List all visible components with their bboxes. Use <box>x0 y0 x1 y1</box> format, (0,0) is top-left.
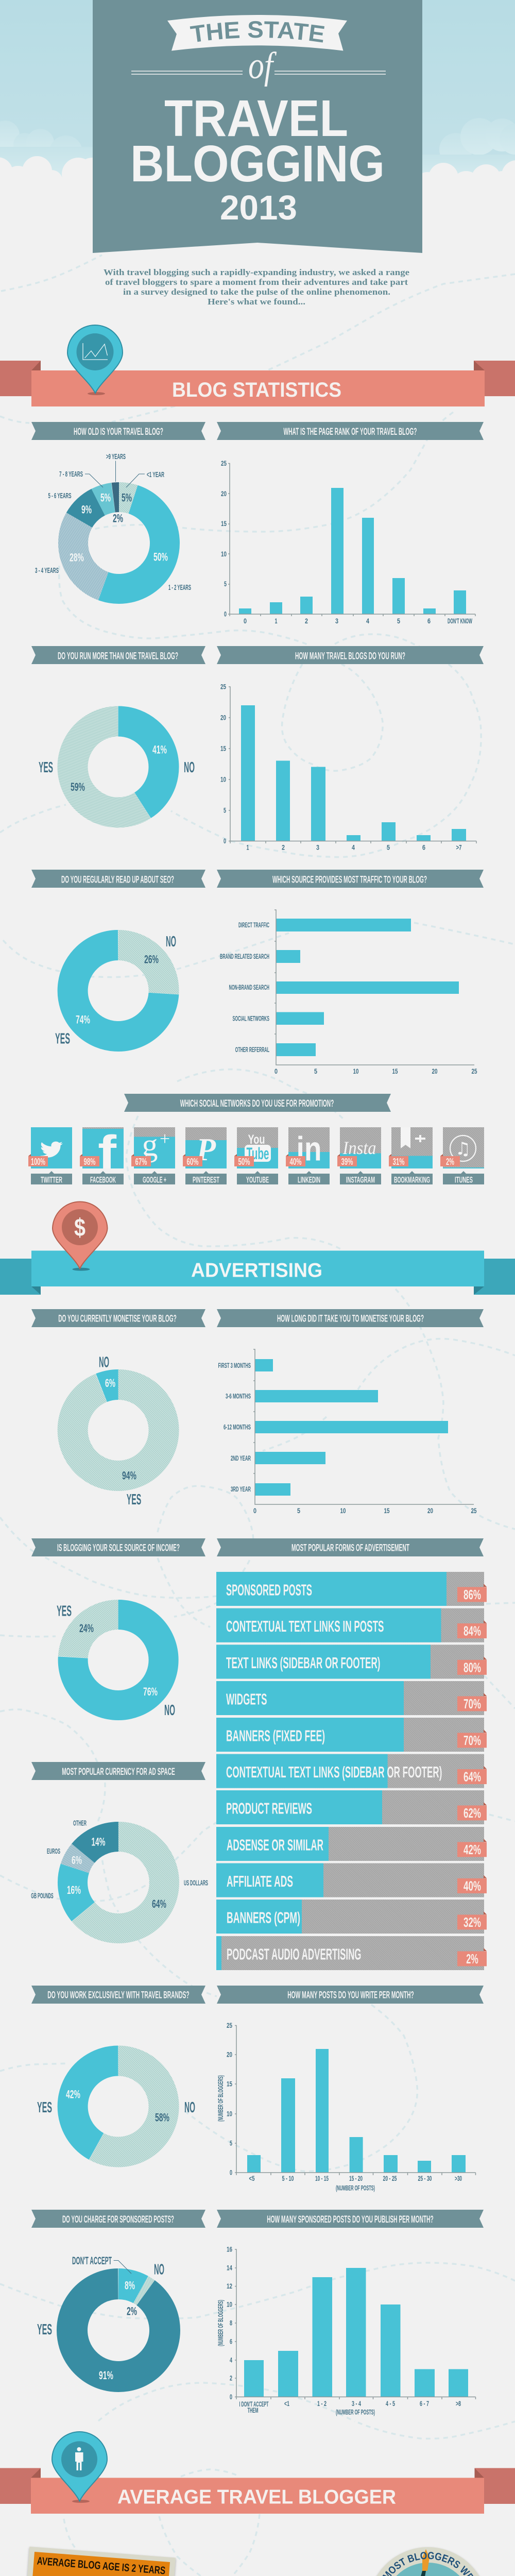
bar chart: sponsored posts per month <box>217 2245 476 2416</box>
bar chart: sponsored posts per month: THEM <box>247 2406 259 2414</box>
tile: bookmarking <box>389 1127 433 1185</box>
horizontal bar chart: time to monetise: 3RD YEAR <box>231 1485 251 1493</box>
panel: social network tiles <box>28 1126 484 1185</box>
donut chart: blog age: 5% <box>122 492 132 504</box>
bar chart: number of blogs: 2 <box>282 844 285 851</box>
row: product reviews 62 percent <box>216 1790 487 1824</box>
label: social networks: WHICH SOCIAL NETWORKS DO YOU USE FOR PROMOTION? <box>180 1098 334 1109</box>
bar chart: page rank: 0 <box>244 617 247 625</box>
tile: instagram: INSTAGRAM <box>346 1175 375 1185</box>
intro text: in a survey designed to take the pulse of the online phenomenon. <box>123 287 390 297</box>
row: adsense 42 percent: 42% <box>464 1842 481 1857</box>
title: travel: TRAVEL <box>164 90 348 147</box>
donut chart: blog age: 3 - 4 YEARS <box>35 566 59 575</box>
bar chart: number of blogs: 10 <box>220 776 226 783</box>
title ribbon: the state: THE STATE <box>190 21 324 42</box>
bar chart: posts per month: >30 <box>455 2175 462 2182</box>
bar chart: number of blogs: 15 <box>220 745 226 752</box>
section ribbon: advertising <box>0 1251 515 1295</box>
row: podcast audio 2 percent <box>216 1936 487 1970</box>
tile: youtube: Tube <box>246 1144 269 1163</box>
bar chart: sponsored posts per month: <1 <box>284 2400 289 2408</box>
section ribbon: average travel blogger <box>0 2468 515 2514</box>
bar chart: number of blogs: 4 <box>352 844 355 851</box>
horizontal bar chart: traffic source: DIRECT TRAFFIC <box>238 921 269 929</box>
bar chart: posts per month: 25 - 30 <box>418 2175 432 2182</box>
bar chart: sponsored posts per month: I DON'T ACCEPT <box>239 2400 269 2408</box>
label: advertisement forms: MOST POPULAR FORMS OF ADVERTISEMENT <box>291 1543 409 1554</box>
label: social networks <box>124 1094 391 1112</box>
title: blogging: BLOGGING <box>130 135 385 193</box>
text: NO <box>164 1702 175 1719</box>
tile: twitter: TWITTER <box>41 1175 62 1185</box>
tile: google plus: 67% <box>135 1157 147 1167</box>
text: NO <box>166 934 176 950</box>
bar chart: page rank <box>221 460 475 625</box>
label: travel brands <box>31 1986 205 2004</box>
donut chart: monetise: YES <box>127 1492 141 1508</box>
label: seo <box>31 870 205 888</box>
bar chart: page rank: 3 <box>335 617 338 625</box>
tile: youtube <box>234 1127 278 1185</box>
title: of with double rules <box>131 45 386 87</box>
horizontal bar chart: traffic source: 0 <box>274 1067 278 1075</box>
donut chart: more than one blog: YES <box>39 759 53 776</box>
bar chart: page rank: 6 <box>427 617 431 625</box>
bar chart: page rank: 1 <box>275 617 278 625</box>
horizontal bar chart: traffic source: 5 <box>314 1067 317 1075</box>
bar chart: page rank: 4 <box>366 617 369 625</box>
donut chart: currency: 6% <box>72 1854 82 1867</box>
donut chart: sole income <box>57 1603 175 1719</box>
tile: google plus: + <box>160 1128 170 1149</box>
donut chart: seo: 26% <box>144 953 159 965</box>
title: 2013: 2013 <box>220 189 297 227</box>
row: contextual text links sidebar 64 percent <box>216 1754 487 1788</box>
bar chart: posts per month: 15 - 20 <box>349 2175 363 2182</box>
row: text links 80 percent <box>216 1645 487 1679</box>
bar chart: posts per month: 10 - 15 <box>315 2175 329 2182</box>
tile: facebook <box>80 1126 124 1185</box>
tile: youtube: YOUTUBE <box>246 1175 269 1185</box>
row: banners fixed fee 70 percent <box>216 1718 487 1752</box>
tile: twitter: 100% <box>31 1157 45 1167</box>
icon: dollar map pin: $ <box>74 1214 85 1242</box>
bar chart: number of blogs: 25 <box>220 683 226 690</box>
donut chart: more than one blog <box>39 704 195 830</box>
tile: facebook: 98% <box>83 1157 96 1167</box>
donut chart: sole income: 24% <box>79 1622 94 1635</box>
title ribbon: the state <box>167 15 347 50</box>
bar chart: number of blogs: 3 <box>316 844 319 851</box>
horizontal bar chart: time to monetise: 10 <box>340 1507 346 1515</box>
bar chart: sponsored posts per month: 16 <box>227 2245 232 2253</box>
tile: youtube: You <box>248 1132 265 1147</box>
tile: google plus <box>131 1127 175 1185</box>
icon: dollar map pin <box>53 1202 107 1271</box>
bar chart: sponsored posts per month: >8 <box>456 2400 461 2408</box>
bar chart: sponsored posts per month: 14 <box>227 2264 232 2272</box>
bar chart: number of blogs: 5 <box>224 807 226 814</box>
label: sole income: IS BLOGGING YOUR SOLE SOURCE OF INCOME? <box>57 1543 180 1554</box>
row: widgets 70 percent: 70% <box>464 1696 481 1711</box>
bar chart: number of blogs: 0 <box>224 837 226 845</box>
row: contextual text links in posts 84 percent <box>216 1608 487 1642</box>
label: how old is your travel blog <box>31 422 205 440</box>
donut chart: travel brands: YES <box>37 2099 52 2116</box>
tile: itunes <box>440 1127 484 1185</box>
donut chart: charge for sponsored posts: DON'T ACCEPT <box>72 2255 112 2267</box>
tile: itunes: ITUNES <box>455 1175 473 1185</box>
label: sponsored posts per month <box>217 2210 484 2228</box>
donut chart: charge for sponsored posts: 91% <box>99 2369 113 2382</box>
label: how many blogs: HOW MANY TRAVEL BLOGS DO YOU RUN? <box>295 651 405 662</box>
row: adsense 42 percent <box>216 1827 487 1861</box>
label: traffic source <box>217 870 484 888</box>
bar chart: posts per month: 15 <box>227 2080 232 2088</box>
horizontal bar chart: time to monetise: 5 <box>297 1507 300 1515</box>
section ribbon: blog statistics <box>0 361 515 406</box>
label: currency <box>31 1762 205 1780</box>
tile: facebook: FACEBOOK <box>90 1175 116 1185</box>
bar chart: posts per month <box>217 2022 476 2192</box>
donut chart: currency: 64% <box>152 1897 166 1910</box>
bar chart: number of blogs: 1 <box>246 844 249 851</box>
donut chart: blog age: <1 YEAR <box>147 470 164 479</box>
bar chart: posts per month: 0 <box>230 2169 232 2176</box>
row: banners fixed fee 70 percent: BANNERS (FIXED FEE) <box>226 1727 325 1744</box>
donut chart: more than one blog: 59% <box>71 781 85 793</box>
label: seo: DO YOU REGULARLY READ UP ABOUT SEO? <box>61 875 174 885</box>
row: affiliate ads 40 percent: AFFILIATE ADS <box>227 1873 293 1890</box>
donut chart: more than one blog: 41% <box>152 743 167 756</box>
donut chart: blog age: 28% <box>70 551 84 564</box>
panel: advertisement form bars <box>216 1572 487 1970</box>
horizontal bar chart: time to monetise: 3-6 MONTHS <box>226 1392 251 1400</box>
donut chart: blog age: >9 YEARS <box>106 452 126 461</box>
bar chart: sponsored posts per month: 3 - 4 <box>352 2400 361 2408</box>
row: affiliate ads 40 percent: 40% <box>464 1878 481 1894</box>
bar chart: sponsored posts per month: 12 <box>227 2282 232 2290</box>
row: product reviews 62 percent: 62% <box>464 1805 481 1821</box>
row: sponsored posts 86 percent: 86% <box>464 1587 481 1602</box>
donut chart: monetise: 94% <box>122 1469 136 1482</box>
donut chart: seo: YES <box>55 1030 70 1047</box>
donut chart: blog age <box>35 452 191 606</box>
text: NO <box>184 759 195 776</box>
bar chart: page rank: 20 <box>221 490 227 498</box>
donut chart: travel brands: 58% <box>155 2111 169 2124</box>
label: charge for sponsored posts: DO YOU CHARGE FOR SPONSORED POSTS? <box>62 2214 174 2225</box>
intro text: With travel blogging such a rapidly-expanding industry, we asked a range <box>104 267 409 277</box>
row: banners cpm 32 percent: 32% <box>464 1914 481 1930</box>
label: advertisement forms <box>217 1538 484 1556</box>
label: run more than one blog: DO YOU RUN MORE THAN ONE TRAVEL BLOG? <box>58 651 178 662</box>
row: banners cpm 32 percent: BANNERS (CPM) <box>227 1909 300 1927</box>
bar chart: sponsored posts per month: 4 <box>230 2357 232 2364</box>
row: product reviews 62 percent: PRODUCT REVIEWS <box>226 1800 312 1818</box>
statue <box>421 2571 426 2576</box>
intro text: of travel bloggers to spare a moment from their adventures and take part <box>105 277 408 287</box>
row: contextual text links in posts 84 percent: 84% <box>464 1623 481 1639</box>
bar chart: page rank: DON'T KNOW <box>448 617 472 625</box>
donut chart: travel brands: 42% <box>66 2088 80 2101</box>
label: how many blogs <box>217 646 484 664</box>
donut chart: blog age: 9% <box>81 503 92 516</box>
text: NO <box>184 2099 195 2116</box>
sky with clouds <box>0 0 515 201</box>
tile: linkedin: 40% <box>289 1157 302 1167</box>
donut chart: blog age: 50% <box>153 550 168 564</box>
donut chart: monetise <box>59 1354 177 1508</box>
tile: google plus: GOOGLE + <box>143 1175 166 1185</box>
tile: pinterest: PINTEREST <box>193 1175 219 1185</box>
donut chart: currency: EUROS <box>47 1847 60 1856</box>
tile: linkedin <box>286 1127 330 1185</box>
row: contextual text links in posts 84 percent: CONTEXTUAL TEXT LINKS IN POSTS <box>226 1618 384 1635</box>
bar chart: page rank: 5 <box>224 580 227 588</box>
text: US DOLLARS <box>184 1879 208 1888</box>
bar chart: posts per month: <5 <box>249 2175 255 2182</box>
sticker: orange elephant poster <box>22 2547 176 2576</box>
tile: pinterest <box>183 1127 227 1185</box>
label: charge for sponsored posts <box>31 2210 205 2228</box>
bar chart: posts per month: 5 <box>230 2139 232 2147</box>
bar chart: page rank: 25 <box>221 460 227 467</box>
donut chart: blog age: 2% <box>113 512 123 524</box>
label: time to monetise <box>217 1309 484 1327</box>
donut chart: sole income: 76% <box>143 1685 158 1698</box>
donut chart: currency: 16% <box>67 1884 81 1896</box>
bar chart: sponsored posts per month: (NUMBER OF POSTS) <box>336 2408 375 2416</box>
label: currency: MOST POPULAR CURRENCY FOR AD SPACE <box>62 1767 175 1777</box>
donut chart: seo: 74% <box>76 1013 90 1026</box>
tile: pinterest: 60% <box>186 1157 199 1167</box>
donut chart: blog age: 7 - 8 YEARS <box>59 470 83 479</box>
bar chart: sponsored posts per month: 6 - 7 <box>420 2400 429 2408</box>
bar chart: number of blogs: >7 <box>456 844 461 851</box>
tile: bookmarking: BOOKMARKING <box>394 1175 430 1185</box>
donut chart: charge for sponsored posts: NO <box>154 2262 164 2278</box>
bar chart: number of blogs: 5 <box>387 844 390 851</box>
intro text <box>104 267 409 307</box>
donut chart: currency: GB POUNDS <box>31 1891 54 1900</box>
horizontal bar chart: time to monetise: 6-12 MONTHS <box>224 1423 251 1431</box>
donut chart: currency: OTHER <box>73 1819 87 1828</box>
donut chart: charge for sponsored posts <box>37 2255 183 2395</box>
tile: twitter <box>28 1127 72 1185</box>
bar chart: posts per month: 25 <box>227 2022 232 2029</box>
donut chart: blog age: 5% <box>100 492 111 504</box>
donut chart: travel brands <box>37 2044 195 2168</box>
donut chart: seo <box>55 934 176 1047</box>
bar chart: page rank: 2 <box>305 617 308 625</box>
bar chart: posts per month: 20 <box>227 2050 232 2059</box>
tile: itunes: 2% <box>446 1157 454 1167</box>
horizontal bar chart: traffic source: NON-BRAND SEARCH <box>229 984 269 991</box>
horizontal bar chart: traffic source: SOCIAL NETWORKS <box>233 1015 269 1022</box>
horizontal bar chart: time to monetise: 2ND YEAR <box>231 1454 251 1462</box>
donut chart: sole income: YES <box>57 1603 72 1620</box>
donut chart: blog age: 5 - 6 YEARS <box>48 492 71 500</box>
row: podcast audio 2 percent: 2% <box>466 1951 478 1967</box>
horizontal bar chart: traffic source: 20 <box>432 1067 438 1075</box>
bar chart: sponsored posts per month: (NUMBER OF BLOGGERS) <box>217 2300 225 2346</box>
horizontal bar chart: traffic source: BRAND RELATED SEARCH <box>220 953 269 960</box>
intro text: Here's what we found... <box>208 297 305 307</box>
tile: instagram: Insta <box>342 1138 376 1158</box>
horizontal bar chart: time to monetise: 25 <box>471 1507 477 1515</box>
label: travel brands: DO YOU WORK EXCLUSIVELY WITH TRAVEL BRANDS? <box>47 1990 190 2001</box>
row: widgets 70 percent <box>216 1681 487 1715</box>
bar chart: page rank: 0 <box>224 610 227 618</box>
tile: youtube: 50% <box>238 1157 250 1167</box>
label: posts per month <box>217 1986 484 2004</box>
label: monetise: DO YOU CURRENTLY MONETISE YOUR BLOG? <box>58 1314 177 1324</box>
row: sponsored posts 86 percent: SPONSORED POSTS <box>226 1582 312 1599</box>
donut chart: charge for sponsored posts: YES <box>37 2321 52 2338</box>
sticker: pink mountain oval <box>171 2569 371 2576</box>
row: text links 80 percent: 80% <box>464 1659 481 1675</box>
tile: bookmarking: 31% <box>392 1157 405 1167</box>
tile: facebook: f <box>98 1126 116 1179</box>
title panel <box>93 0 422 253</box>
donut chart: charge for sponsored posts: 2% <box>127 2305 137 2317</box>
icon: chart map pin <box>67 325 123 395</box>
icon: person map pin <box>52 2432 107 2503</box>
donut chart: currency <box>31 1818 208 1947</box>
horizontal bar chart: time to monetise <box>218 1349 477 1515</box>
row: widgets 70 percent: WIDGETS <box>226 1691 267 1708</box>
bar chart: sponsored posts per month: 2 <box>230 2374 232 2382</box>
bar chart: page rank: 10 <box>221 550 227 558</box>
bar chart: page rank: 5 <box>397 617 400 625</box>
tile: pinterest: P <box>196 1132 216 1167</box>
donut chart: monetise: NO <box>99 1354 109 1370</box>
bar chart: posts per month: 20 - 25 <box>383 2175 397 2182</box>
bar chart: number of blogs <box>220 683 476 851</box>
bar chart: posts per month: (NUMBER OF POSTS) <box>336 2184 375 2192</box>
tile: instagram: 39% <box>341 1157 353 1167</box>
bar chart: sponsored posts per month: 6 <box>230 2338 232 2345</box>
horizontal bar chart: time to monetise: 20 <box>427 1507 433 1515</box>
tile: google plus: g <box>142 1128 158 1163</box>
tile: itunes: ♫ <box>455 1139 471 1159</box>
row: banners cpm 32 percent <box>216 1900 487 1934</box>
section ribbon: blog statistics: BLOG STATISTICS <box>172 379 341 401</box>
horizontal bar chart: traffic source: OTHER REFERRAL <box>235 1046 269 1054</box>
horizontal bar chart: time to monetise: 15 <box>384 1507 390 1515</box>
row: affiliate ads 40 percent <box>216 1863 487 1897</box>
bar chart: number of blogs: 20 <box>220 714 226 721</box>
row: text links 80 percent: TEXT LINKS (SIDEBAR OR FOOTER) <box>226 1654 380 1672</box>
row: adsense 42 percent: ADSENSE OR SIMILAR <box>227 1836 323 1854</box>
donut chart: blog age: 1 - 2 YEARS <box>168 583 191 592</box>
horizontal bar chart: traffic source: 15 <box>392 1067 398 1075</box>
bar chart: sponsored posts per month: 10 <box>227 2301 232 2308</box>
section ribbon: average travel blogger: AVERAGE TRAVEL BLOGGER <box>117 2486 396 2508</box>
row: sponsored posts 86 percent <box>216 1572 487 1606</box>
horizontal bar chart: time to monetise: 0 <box>253 1507 256 1515</box>
row: podcast audio 2 percent: PODCAST AUDIO ADVERTISING <box>227 1945 362 1963</box>
bar chart: sponsored posts per month: 8 <box>230 2319 232 2327</box>
bar chart: posts per month: 10 <box>227 2110 232 2117</box>
label: posts per month: HOW MANY POSTS DO YOU WRITE PER MONTH? <box>287 1990 414 2001</box>
bar chart: sponsored posts per month: 1 - 2 <box>317 2400 327 2408</box>
bar chart: number of blogs: 6 <box>422 844 425 851</box>
donut chart: monetise: 6% <box>105 1377 115 1389</box>
row: contextual text links sidebar 64 percent: 64% <box>464 1769 481 1785</box>
bar chart: sponsored posts per month: 0 <box>230 2393 232 2401</box>
label: run more than one blog <box>31 646 205 664</box>
row: banners fixed fee 70 percent: 70% <box>464 1733 481 1748</box>
title: of with double rules: of <box>248 45 277 87</box>
tile: linkedin: in <box>297 1129 321 1167</box>
tile: instagram <box>337 1127 381 1185</box>
bar chart: sponsored posts per month: 4 - 5 <box>386 2400 395 2408</box>
tile: linkedin: LINKEDIN <box>298 1175 320 1185</box>
label: how old is your travel blog: HOW OLD IS YOUR TRAVEL BLOG? <box>74 427 163 437</box>
horizontal bar chart: time to monetise: FIRST 3 MONTHS <box>218 1362 251 1369</box>
label: monetise <box>31 1309 205 1327</box>
horizontal bar chart: traffic source <box>220 910 477 1075</box>
section ribbon: advertising: ADVERTISING <box>191 1259 322 1282</box>
donut chart: charge for sponsored posts: 8% <box>125 2279 135 2292</box>
bar chart: posts per month: (NUMBER OF BLOGGERS) <box>217 2075 225 2122</box>
bar chart: page rank: 15 <box>221 520 227 528</box>
donut chart: currency: 14% <box>92 1835 105 1849</box>
horizontal bar chart: traffic source: 25 <box>472 1067 477 1075</box>
label: page rank <box>217 422 484 440</box>
bar chart: posts per month: 5 - 10 <box>282 2175 294 2182</box>
label: sole income <box>31 1538 205 1556</box>
horizontal bar chart: traffic source: 10 <box>353 1067 358 1075</box>
